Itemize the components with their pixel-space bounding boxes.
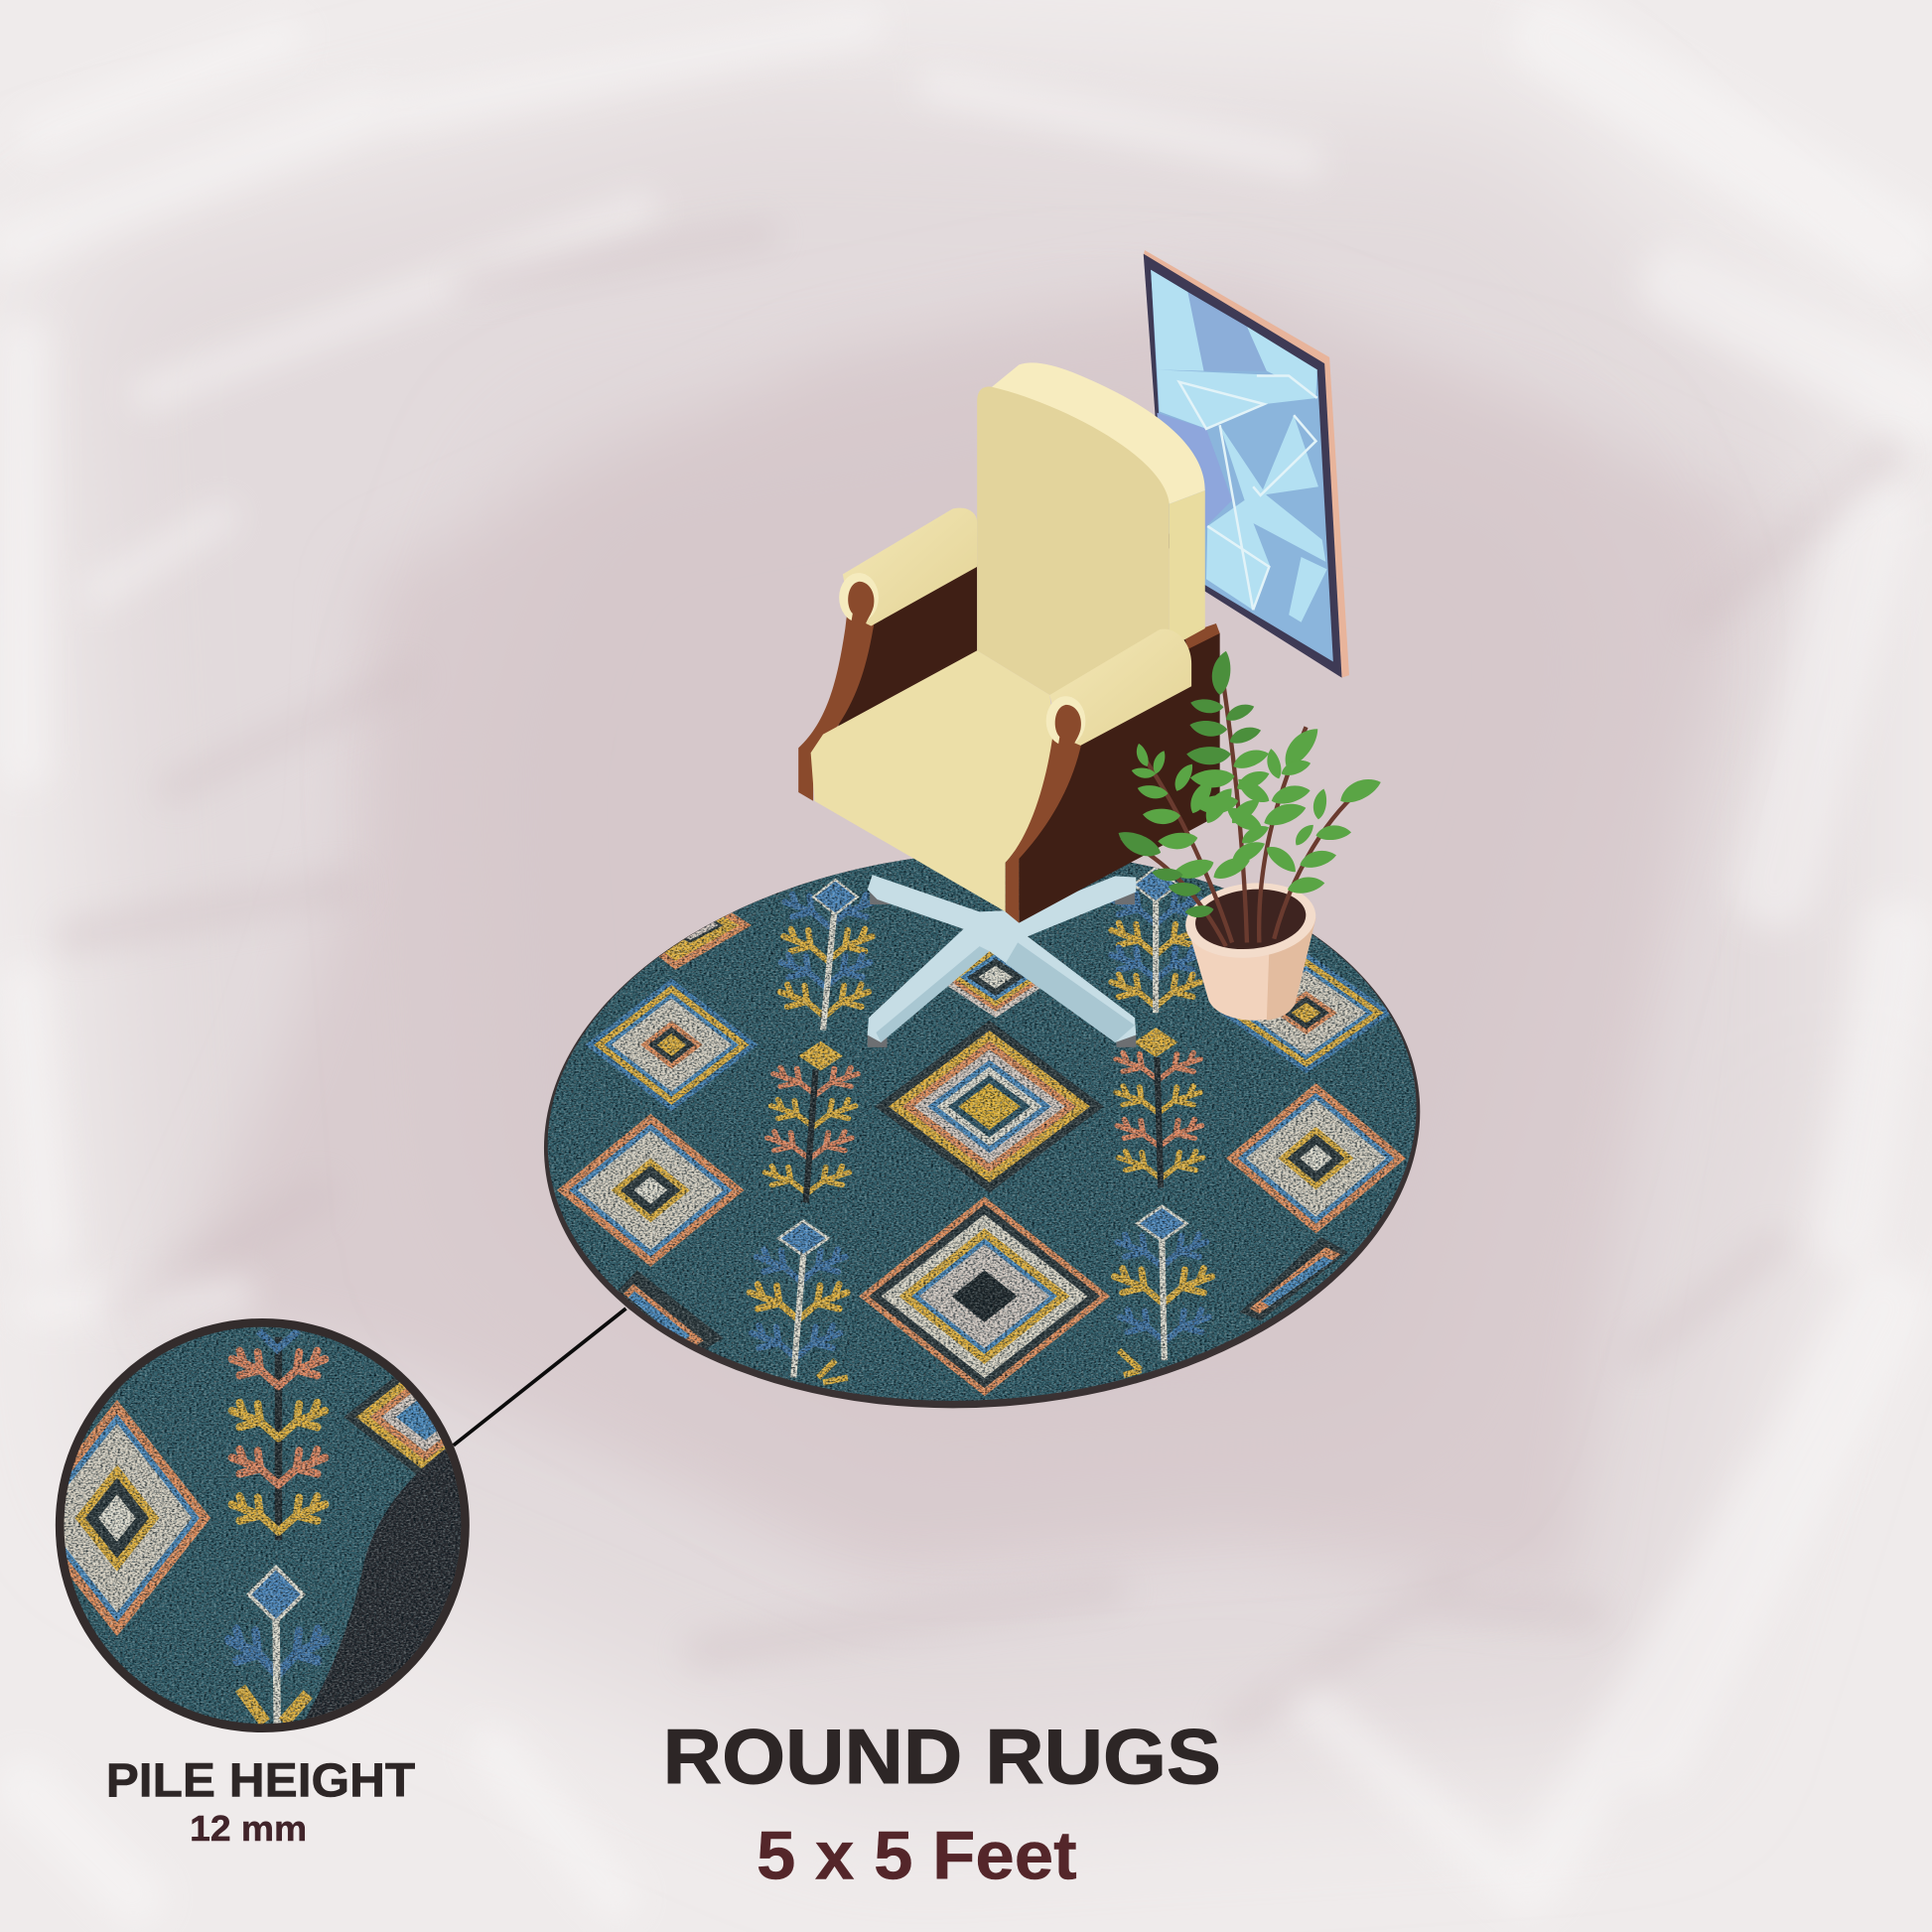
rug plant motif bottom left [750, 1221, 848, 1382]
casters [868, 890, 1136, 1047]
rug bottom centre diamond [859, 1196, 1110, 1396]
picture glass [1151, 270, 1333, 661]
size label: 5 x 5 Feet [757, 1819, 1077, 1894]
picture frame [1144, 254, 1342, 678]
left roll end [839, 573, 879, 628]
title: ROUND RUGS [663, 1713, 1221, 1800]
left wood trim [798, 587, 875, 801]
rug plant motif top left [780, 880, 874, 1031]
inset bottom-left edge [62, 1626, 160, 1737]
inset plant motif [228, 1330, 326, 1725]
left dark panel [835, 564, 977, 736]
inset left diamond [24, 1400, 210, 1636]
inset backing corner [302, 1440, 481, 1749]
star legs [868, 875, 1136, 1042]
wall picture [1144, 250, 1349, 678]
rug top centre diamond [934, 936, 1057, 1018]
inset detail circle: pile height [24, 1307, 506, 1749]
pile height label: PILE HEIGHT [106, 1753, 416, 1807]
right roll end [1046, 696, 1085, 752]
picture wooden edge [1144, 250, 1349, 678]
rug centre diamond [875, 1021, 1104, 1192]
rug shadow edge [525, 823, 1439, 1437]
rug right upper diamond [1220, 952, 1392, 1073]
rug left upper diamond [586, 978, 758, 1111]
rug right lower diamond [1226, 1083, 1406, 1233]
round rug [548, 858, 1417, 1401]
mauve brush strokes [73, 234, 1885, 1725]
leaves [1114, 649, 1384, 918]
right dark panel [1019, 633, 1220, 923]
connector line to inset [454, 1309, 625, 1446]
rug partial diamonds [617, 908, 1348, 1351]
right arm roll [1049, 629, 1191, 746]
inset partial diamond [344, 1353, 506, 1481]
rug plant motif top right [1111, 868, 1200, 1013]
chair back front [977, 386, 1170, 695]
rug left lower diamond [557, 1114, 745, 1267]
right top wood lip [1184, 623, 1220, 649]
stems [1121, 659, 1361, 946]
rug plant motif bottom right [1114, 1206, 1212, 1375]
rug plant motif middle left [764, 1041, 858, 1202]
chair base [868, 875, 1136, 1047]
chair back top [992, 362, 1205, 504]
chair back side [1170, 490, 1205, 648]
plant pot [1181, 877, 1319, 1021]
left arm roll [843, 508, 977, 625]
seat cushion [811, 650, 1054, 911]
armchair [798, 362, 1220, 923]
rug plant motif middle right [1116, 1028, 1203, 1187]
plant stems and leaves [1114, 649, 1384, 946]
right wood trim [1006, 712, 1082, 923]
pile height value: 12 mm [190, 1808, 307, 1849]
